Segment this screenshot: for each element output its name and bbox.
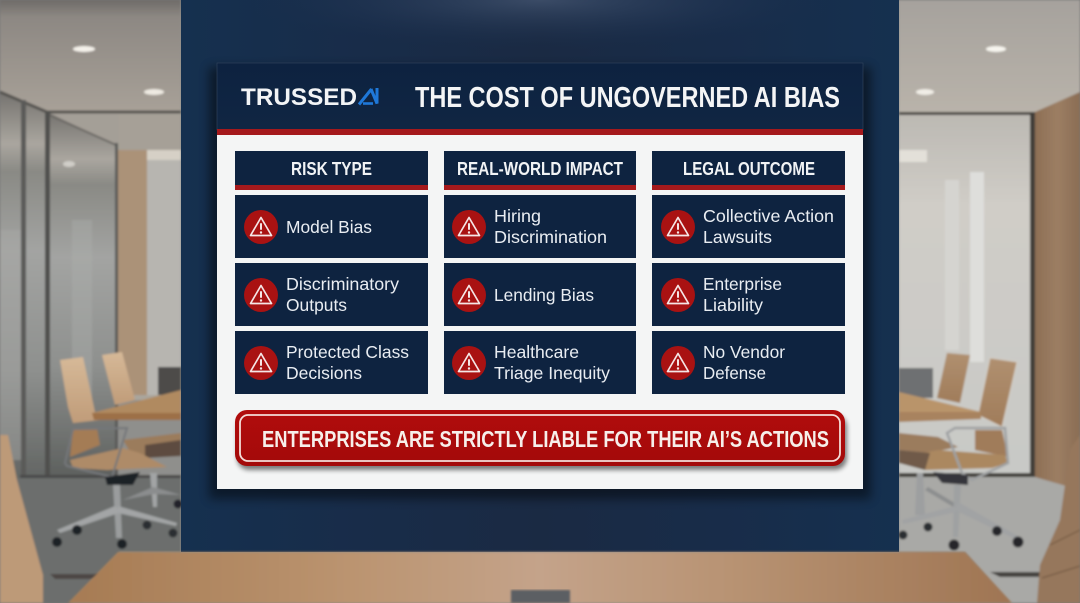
row: protected class decisions: Protected Class [286,342,409,362]
left glass partition [0,92,181,490]
callout banner [235,410,847,470]
left room ceiling [0,0,181,112]
left conference chairs [52,352,182,549]
right floor [899,477,1080,603]
row: lending bias [444,263,636,326]
board panel [209,63,871,499]
row: no vendor defense [652,331,845,394]
row: enterprise liability: Liability [703,295,763,315]
row: collective action lawsuits: Lawsuits [703,227,772,247]
row: enterprise liability [652,263,845,326]
title: THE COST OF UNGOVERNED AI BIAS [415,82,840,114]
row: hiring discrimination: Discrimination [494,227,607,247]
wooden table foreground [68,552,1012,603]
column heading [235,151,428,190]
far chair [937,353,970,403]
left floor [0,477,181,603]
row: collective action lawsuits: Collective Action [703,206,834,226]
column heading: RISK TYPE [291,159,372,179]
near chair [60,357,100,423]
column heading [444,151,636,190]
right table [899,392,981,412]
column heading: LEGAL OUTCOME [683,159,815,179]
row: discriminatory outputs: Discriminatory [286,274,399,294]
right wood wall [1035,92,1080,490]
navy feature wall [181,0,899,552]
row: model bias: Model Bias [286,217,372,237]
far chair [102,352,135,405]
left table [92,390,181,414]
foreground chair right [1037,435,1080,603]
laptop edge on table [511,590,570,603]
column: real-world impact [444,151,636,394]
row: healthcare triage inequity [444,331,636,394]
row: healthcare triage inequity: Healthcare [494,342,579,362]
row: hiring discrimination: Hiring [494,206,541,226]
column: risk type [235,151,428,394]
row: collective action lawsuits [652,195,845,258]
callout banner: ENTERPRISES ARE STRICTLY LIABLE FOR THEIR AI’S ACTIONS [262,426,829,452]
logo: Trussed AI: TRUSSED [241,84,357,111]
right glass partition [899,112,1036,478]
row: no vendor defense: Defense [703,363,766,383]
row: healthcare triage inequity: Triage Inequity [494,363,610,383]
column heading [652,151,845,190]
row: discriminatory outputs [235,263,428,326]
row: lending bias: Lending Bias [494,285,594,305]
icon: AI logo mark [359,88,377,104]
column heading: REAL-WORLD IMPACT [457,159,623,179]
row: discriminatory outputs: Outputs [286,295,347,315]
row: hiring discrimination [444,195,636,258]
row: enterprise liability: Enterprise [703,274,782,294]
row: model bias [235,195,428,258]
column: legal outcome [652,151,845,394]
right room ceiling [899,0,1080,112]
row: no vendor defense: No Vendor [703,342,785,362]
foreground chair left [0,435,43,603]
near chair [978,358,1017,427]
header band [217,63,863,135]
right conference chairs [898,353,1024,550]
row: protected class decisions [235,331,428,394]
row: protected class decisions: Decisions [286,363,362,383]
